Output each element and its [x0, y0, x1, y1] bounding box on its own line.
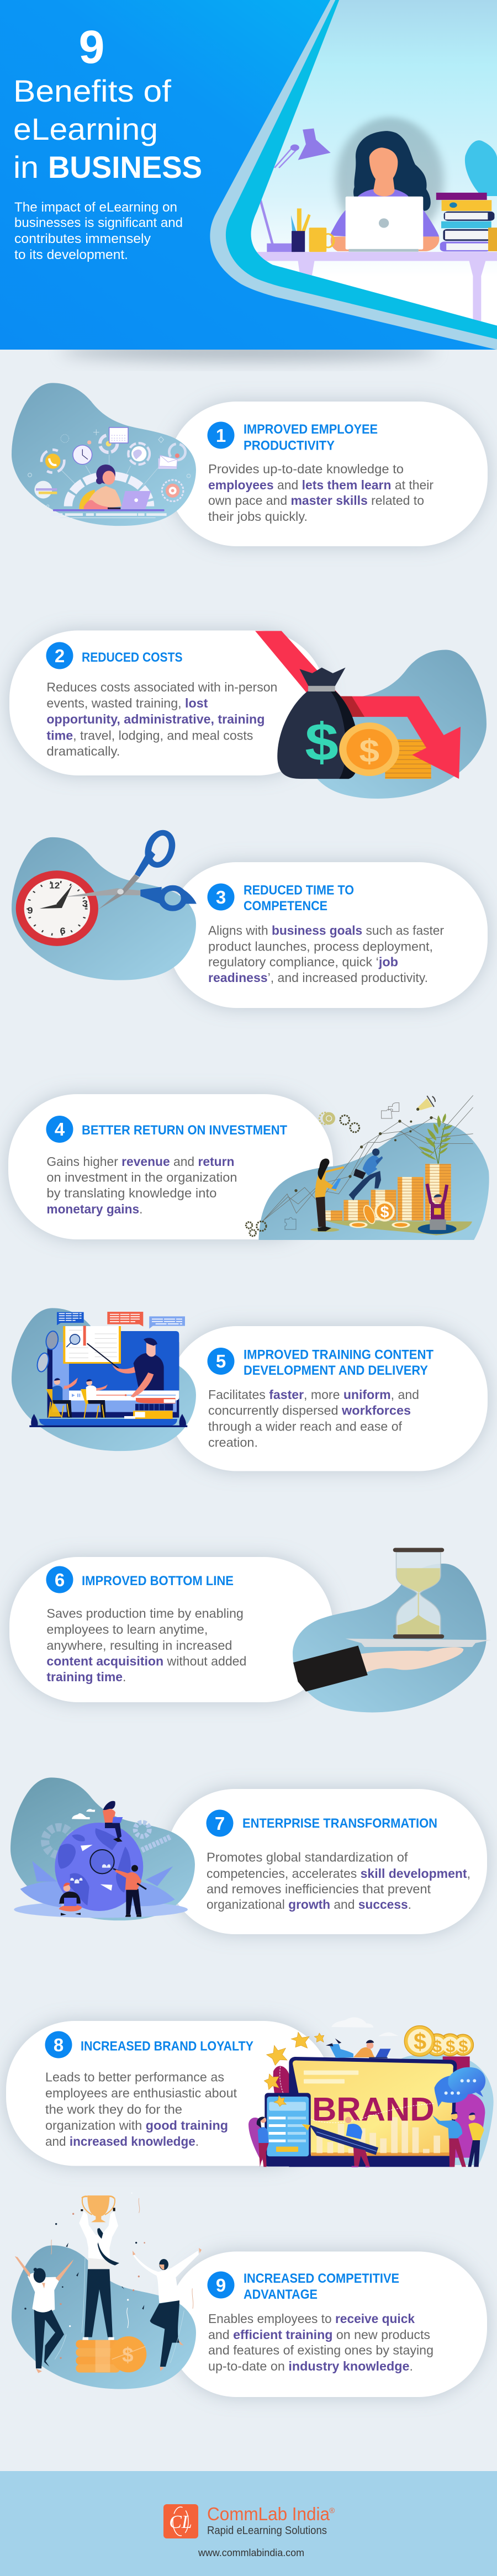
heading 6: IMPROVED BOTTOM LINE — [82, 1574, 234, 1588]
heading 5 — [244, 1347, 433, 1378]
body 4 — [46, 1154, 237, 1216]
illustration: hourglass on tray — [293, 1548, 491, 1692]
heading 9: ADVANTAGE — [244, 2287, 318, 2302]
body 1: own pace and master skills related to — [208, 493, 424, 508]
body 7: Promotes global standardization of — [207, 1850, 408, 1865]
body 3: regulatory compliance, quick ‘ job — [208, 955, 398, 969]
heading 1: PRODUCTIVITY — [244, 439, 335, 453]
badge 6 — [46, 1566, 73, 1593]
body 2: events, wasted training, lost — [46, 696, 208, 710]
badge 9: 9 — [216, 2275, 226, 2295]
panel: benefit 1 — [12, 383, 488, 546]
illustration: online classroom — [29, 1312, 187, 1427]
body 4: Gains higher revenue and return — [46, 1154, 234, 1169]
illustration: brand tablet: $ — [458, 2037, 468, 2056]
body 7 — [207, 1850, 470, 1912]
body 8: Leads to better performance as — [45, 2070, 224, 2084]
body 5: creation. — [208, 1435, 258, 1450]
blob 5 — [12, 1308, 196, 1451]
website: www.commlabindia.com — [198, 2547, 304, 2558]
intro text: contributes immensely — [14, 231, 151, 246]
illustration: scissors cutting clock — [16, 831, 197, 946]
title — [13, 21, 202, 184]
panel: benefit 5 — [12, 1308, 488, 1471]
body 8 — [45, 2070, 237, 2149]
body 9: up-to-date on industry knowledge. — [208, 2359, 413, 2373]
intro text: businesses is significant and — [14, 215, 183, 230]
heading 7: ENTERPRISE TRANSFORMATION — [242, 1816, 437, 1831]
body 1: Provides up-to-date knowledge to — [208, 462, 404, 476]
body 4: on investment in the organization — [46, 1170, 237, 1184]
body 7: and removes inefficiencies that prevent — [207, 1882, 431, 1896]
body 8: organization with good training — [45, 2118, 228, 2132]
body 2: opportunity, administrative, training — [46, 712, 265, 726]
desk illustration — [253, 117, 497, 325]
illustration: brand tablet: BRAND — [312, 2091, 435, 2128]
badge 4: 4 — [55, 1119, 65, 1139]
heading 2: REDUCED COSTS — [82, 650, 182, 665]
badge 6: 6 — [55, 1570, 65, 1590]
body 7: competencies, accelerates skill development, — [207, 1866, 470, 1881]
body 2: time, travel, lodging, and meal costs — [46, 728, 253, 742]
title: eLearning — [13, 112, 158, 146]
body 5 — [208, 1387, 419, 1450]
body 6: anywhere, resulting in increased — [46, 1638, 232, 1653]
panel: benefit 2 — [9, 631, 487, 799]
tagline: Rapid eLearning Solutions — [207, 2525, 327, 2537]
body 2: Reduces costs associated with in-person — [46, 680, 277, 694]
panel: benefit 4 — [8, 1094, 489, 1240]
logo mark: CL — [169, 2512, 192, 2532]
heading 5: IMPROVED TRAINING CONTENT — [244, 1347, 433, 1362]
heading 1 — [244, 422, 378, 453]
body 6: Saves production time by enabling — [46, 1606, 244, 1620]
heading 1: IMPROVED EMPLOYEE — [244, 422, 378, 437]
heading 9 — [244, 2271, 399, 2302]
illustration: money bag and falling arrow: $ — [359, 733, 379, 769]
illustration: globe and team — [14, 1801, 188, 1918]
blob 9 — [12, 2245, 196, 2389]
registered mark: ® — [329, 2506, 335, 2515]
body 3: product launches, process deployment, — [208, 939, 433, 954]
body 6: content acquisition without added — [46, 1654, 246, 1668]
badge 2: 2 — [55, 646, 65, 666]
body 9: and features of existing ones by staying — [208, 2343, 433, 2357]
blob 1 — [12, 383, 196, 526]
body 4: by translating knowledge into — [46, 1186, 216, 1200]
body 3: Aligns with business goals such as faster — [208, 923, 444, 938]
title: BUSINESS — [48, 150, 202, 184]
illustration: brand tablet — [248, 2017, 494, 2167]
body 2 — [46, 680, 277, 758]
body 9 — [208, 2311, 433, 2373]
badge 2 — [46, 642, 73, 669]
title: in — [13, 150, 39, 184]
body 3 — [208, 923, 444, 985]
body 2: dramatically. — [46, 744, 120, 758]
blob 2 — [302, 650, 487, 799]
illustration: employee with icons — [28, 427, 191, 518]
badge 4 — [46, 1116, 73, 1143]
body 7: organizational growth and success. — [207, 1897, 411, 1912]
body 1 — [208, 462, 433, 524]
title: Benefits of — [13, 73, 171, 108]
heading 5: DEVELOPMENT AND DELIVERY — [244, 1363, 428, 1378]
heading 9: INCREASED COMPETITIVE — [244, 2271, 399, 2286]
blob 7 — [10, 1777, 195, 1920]
footer — [0, 2471, 497, 2576]
panel: benefit 7 — [10, 1777, 487, 1934]
badge 7: 7 — [215, 1813, 225, 1834]
heading 3: COMPETENCE — [244, 899, 327, 914]
body 5: concurrently dispersed workforces — [208, 1403, 411, 1417]
body 6 — [46, 1606, 246, 1684]
body 5: Facilitates faster, more uniform, and — [208, 1387, 419, 1402]
badge 7 — [207, 1809, 233, 1837]
heading 4: BETTER RETURN ON INVESTMENT — [82, 1123, 287, 1138]
badge 9 — [208, 2271, 234, 2299]
badge 5 — [208, 1348, 234, 1375]
body 3: readiness’, and increased productivity. — [208, 970, 428, 985]
illustration: celebrating team with trophy: $ — [122, 2343, 134, 2366]
blob 6 — [293, 1564, 487, 1712]
badge 8 — [45, 2031, 72, 2058]
illustration: scissors cutting clock: 12 — [49, 881, 60, 890]
panel: benefit 3 — [12, 831, 488, 1008]
intro text: The impact of eLearning on — [14, 200, 177, 215]
badge 1: 1 — [216, 425, 226, 446]
illustration: brand tablet: $ — [414, 2029, 426, 2055]
heading 3 — [244, 883, 354, 914]
badge 3 — [208, 884, 234, 910]
body 8: the work they do for the — [45, 2102, 182, 2116]
badge 5: 5 — [216, 1351, 226, 1371]
illustration: scissors cutting clock: 9 — [27, 905, 33, 916]
header banner — [0, 0, 497, 361]
body 4: monetary gains. — [46, 1202, 142, 1216]
body 9: and efficient training on new products — [208, 2327, 430, 2342]
illustration: growth with coin stacks — [246, 1095, 489, 1240]
illustration: money bag and falling arrow — [255, 631, 461, 779]
logo mark — [163, 2504, 198, 2538]
panel: benefit 8 — [6, 2017, 494, 2167]
body 8: employees are enthusiastic about — [45, 2086, 237, 2100]
intro text: to its development. — [14, 247, 128, 262]
panel: benefit 6 — [9, 1548, 491, 1712]
illustration: scissors cutting clock: 3 — [82, 898, 88, 909]
badge 1 — [208, 422, 234, 448]
brand name: CommLab India — [207, 2504, 330, 2524]
body 6: employees to learn anytime, — [46, 1622, 208, 1637]
intro text — [14, 200, 183, 262]
badge 3: 3 — [216, 887, 226, 907]
body 1: their jobs quickly. — [208, 509, 308, 524]
title: 9 — [79, 21, 104, 73]
panel: benefit 9 — [12, 2193, 487, 2397]
heading 8: INCREASED BRAND LOYALTY — [81, 2039, 253, 2054]
body 9: Enables employees to receive quick — [208, 2311, 415, 2326]
body 8: and increased knowledge. — [45, 2134, 199, 2149]
illustration: scissors cutting clock: 6 — [60, 926, 66, 936]
illustration: money bag and falling arrow: $ — [305, 712, 339, 772]
heading 3: REDUCED TIME TO — [244, 883, 354, 898]
illustration: growth with coin stacks: $ — [380, 1203, 389, 1221]
blob 3 — [12, 837, 196, 980]
body 6: training time. — [46, 1670, 126, 1684]
body 1: employees and lets them learn at their — [208, 478, 433, 492]
body 5: through a wider reach and ease of — [208, 1419, 403, 1434]
illustration: brand tablet: $ — [432, 2037, 442, 2056]
illustration: celebrating team with trophy — [15, 2193, 202, 2373]
illustration: brand tablet: $ — [446, 2037, 455, 2056]
badge 8: 8 — [54, 2035, 64, 2055]
